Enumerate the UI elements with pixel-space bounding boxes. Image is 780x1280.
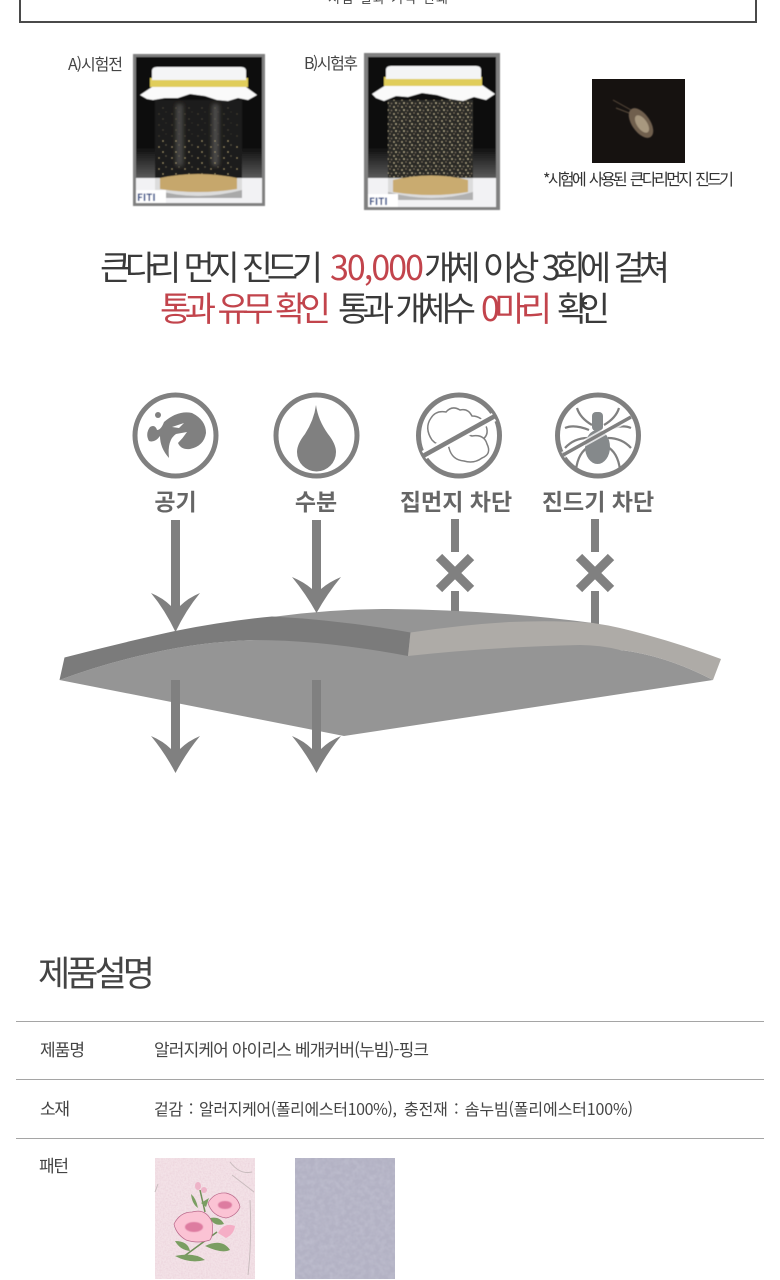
result box frame <box>20 0 756 22</box>
blocked marks behind fabric <box>439 519 611 625</box>
row: product name: 제품명 <box>40 1036 85 1061</box>
headline: 확인 <box>557 282 610 331</box>
icon: mite blocked <box>558 395 638 476</box>
headline: 개체 이상 3회에 걸쳐 <box>424 241 670 290</box>
photo: jar before test <box>133 54 265 206</box>
headline: 0마리 <box>481 282 552 331</box>
fabric cross-section <box>60 609 721 736</box>
table rules <box>16 1022 764 1138</box>
section heading: 제품설명 <box>38 946 155 997</box>
label: after test: B)시험후 <box>304 50 358 74</box>
photo: jar after test <box>364 53 500 210</box>
headline <box>100 241 670 331</box>
row: material: 충전재 : 솜누빔(폴리에스터100%) <box>404 1096 633 1120</box>
row: pattern label: 패턴 <box>39 1152 69 1177</box>
photo: jar before test: FITI <box>137 189 156 204</box>
headline: 통과 개체수 <box>338 282 476 331</box>
label: before test: A)시험전 <box>68 51 123 75</box>
swatch: grey <box>295 1158 395 1279</box>
label: mite blocked: 진드기 차단 <box>542 483 654 517</box>
row: material: 소재 <box>40 1095 70 1120</box>
row: material <box>40 1095 633 1120</box>
arrow: moisture in <box>292 520 341 613</box>
row: material: 겉감 : 알러지케어(폴리에스터100%), <box>154 1096 397 1120</box>
label: dust blocked: 집먼지 차단 <box>400 483 512 517</box>
headline: 통과 유무 확인 <box>160 282 331 331</box>
headline: 30,000 <box>330 241 424 290</box>
label: air: 공기 <box>154 483 197 517</box>
row: product name: 알러지케어 아이리스 베개커버(누빔)-핑크 <box>154 1036 429 1061</box>
swatch: pink floral <box>155 1158 255 1279</box>
icon: dust blocked <box>418 395 500 476</box>
arrow: air out <box>151 680 200 773</box>
caption: mite used in test: *시험에 사용된 큰다리먼지 진드기 <box>543 166 734 190</box>
photo: dust mite <box>592 79 685 163</box>
photo: jar after test: FITI <box>369 193 388 208</box>
headline: 큰다리 먼지 진드기 <box>100 241 323 290</box>
arrow: moisture out <box>292 680 341 773</box>
arrow: air in <box>151 520 200 632</box>
icon: air <box>135 395 216 476</box>
icon: water drop <box>276 395 357 476</box>
label: moisture: 수분 <box>295 483 337 517</box>
